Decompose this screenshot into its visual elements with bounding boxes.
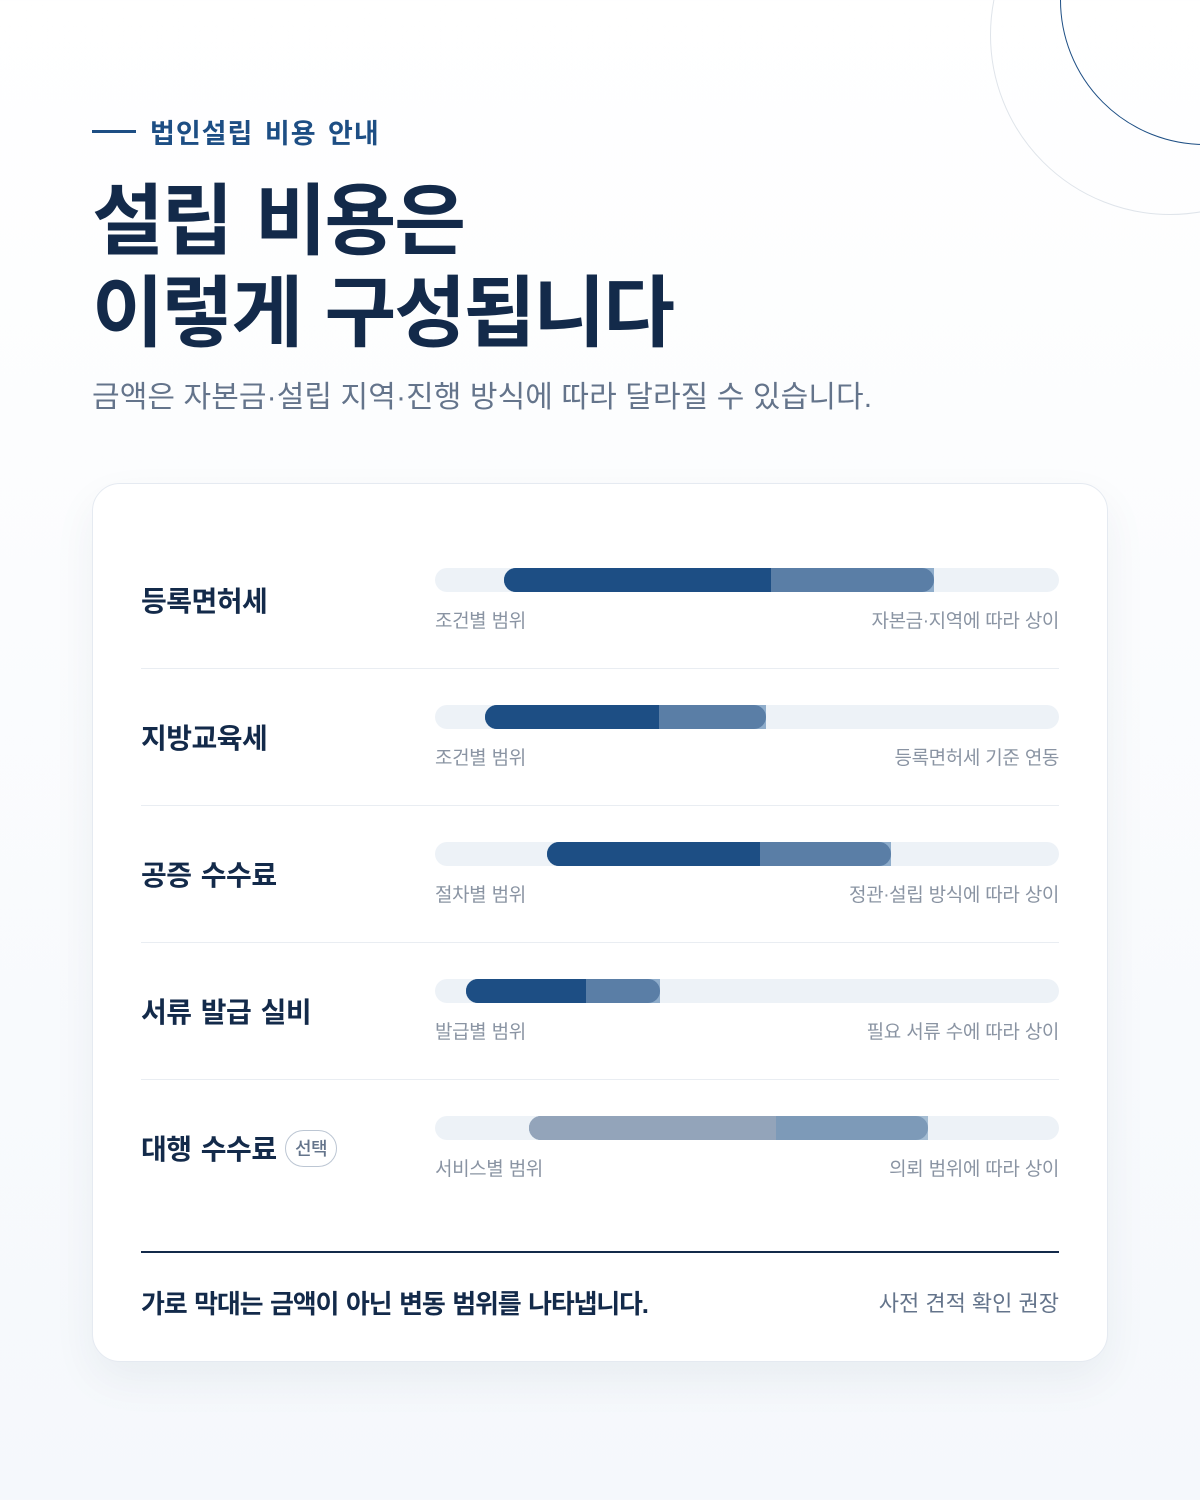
left caption: 조건별 범위 — [435, 611, 526, 632]
title: 설립 비용은 — [92, 177, 464, 265]
title: 이렇게 구성됩니다 — [92, 269, 673, 357]
footer note: 가로 막대는 금액이 아닌 변동 범위를 나타냅니다. — [141, 1289, 648, 1319]
right caption: 자본금·지역에 따라 상이 — [872, 611, 1059, 632]
row: 등록면허세 — [141, 568, 1059, 632]
row: 공증 수수료 — [141, 842, 1059, 906]
left caption: 조건별 범위 — [435, 748, 526, 769]
right caption: 필요 서류 수에 따라 상이 — [867, 1022, 1059, 1043]
range bar — [435, 1116, 1059, 1140]
footer right note: 사전 견적 확인 권장 — [879, 1291, 1059, 1316]
decorative circle: inner — [1060, 0, 1200, 145]
label: 지방교육세 — [141, 723, 267, 754]
eyebrow: 법인설립 비용 안내 — [150, 119, 380, 149]
subtitle: 금액은 자본금·설립 지역·진행 방식에 따라 달라질 수 있습니다. — [92, 381, 872, 414]
right caption: 등록면허세 기준 연동 — [895, 748, 1059, 769]
optional badge: 선택 — [295, 1139, 327, 1159]
left caption: 서비스별 범위 — [435, 1159, 543, 1180]
range bar — [435, 979, 1059, 1003]
row: 대행 수수료 — [141, 1116, 1059, 1180]
panel: cost card — [92, 483, 1108, 1362]
row: 지방교육세 — [141, 705, 1059, 769]
decorative circle: outer — [990, 0, 1200, 215]
optional badge — [285, 1130, 337, 1167]
row: 서류 발급 실비 — [141, 979, 1059, 1043]
label: 서류 발급 실비 — [141, 997, 311, 1028]
right caption: 정관·설립 방식에 따라 상이 — [849, 885, 1059, 906]
eyebrow dash — [92, 130, 136, 133]
range bar — [435, 705, 1059, 729]
label: 등록면허세 — [141, 586, 267, 617]
right caption: 의뢰 범위에 따라 상이 — [889, 1159, 1059, 1180]
left caption: 절차별 범위 — [435, 885, 526, 906]
title — [92, 177, 674, 357]
range bar — [435, 842, 1059, 866]
label: 대행 수수료 — [141, 1134, 277, 1165]
range bar — [435, 568, 1059, 592]
left caption: 발급별 범위 — [435, 1022, 526, 1043]
label: 공증 수수료 — [141, 860, 277, 891]
